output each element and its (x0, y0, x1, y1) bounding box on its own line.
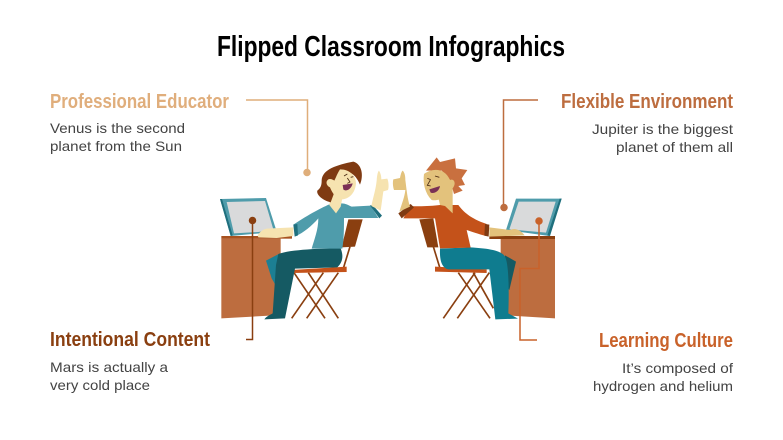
body text (50, 120, 185, 154)
connector: flexible environment (501, 100, 538, 210)
body text: planet from the Sun (50, 138, 182, 154)
chair (419, 218, 493, 318)
trousers (440, 247, 518, 319)
body text: hydrogen and helium (593, 378, 733, 394)
body text: very cold place (50, 377, 150, 393)
hair (317, 162, 362, 202)
neck (329, 192, 343, 213)
raised hand (393, 171, 410, 212)
cuffs (484, 224, 489, 237)
eye (427, 176, 439, 186)
body text: Jupiter is the biggest (592, 121, 733, 137)
panel: learning culture (593, 330, 733, 394)
body text: planet of them all (616, 139, 733, 155)
heading: Professional Educator (50, 91, 229, 113)
trousers (264, 248, 342, 319)
torso and arms (293, 203, 378, 249)
forearm (258, 227, 293, 238)
panel: intentional content (50, 329, 210, 393)
body text: Mars is actually a (50, 359, 168, 375)
mouth (429, 186, 440, 193)
laptop (220, 198, 276, 236)
face (327, 169, 356, 199)
heading: Intentional Content (50, 329, 210, 351)
hair (426, 157, 467, 194)
heading: Learning Culture (599, 330, 733, 352)
body text (592, 121, 733, 155)
cuffs (293, 224, 298, 237)
body text: It’s composed of (622, 360, 733, 376)
desk (489, 236, 555, 318)
panel: flexible environment (561, 91, 733, 155)
title: Flipped Classroom Infographics (217, 31, 565, 63)
raised hand (371, 171, 389, 211)
heading: Flexible Environment (561, 91, 733, 113)
body text (50, 359, 168, 393)
body text: Venus is the second (50, 120, 185, 136)
face (424, 170, 455, 200)
torso and arms (403, 205, 487, 248)
back leg (503, 255, 516, 290)
connector: intentional content (246, 218, 256, 340)
neck (437, 187, 453, 213)
laptop (506, 199, 562, 236)
illustration: woman at desk (220, 162, 389, 319)
desk (221, 236, 292, 318)
illustration: man at desk (393, 157, 562, 319)
panel: professional educator (50, 91, 229, 154)
connector: learning culture (520, 218, 542, 340)
body text (593, 360, 733, 394)
chair (292, 219, 363, 318)
eye (344, 174, 353, 183)
connector: professional educator (246, 100, 310, 176)
forearm (489, 227, 525, 237)
back leg (266, 253, 280, 290)
mouth (343, 183, 353, 190)
